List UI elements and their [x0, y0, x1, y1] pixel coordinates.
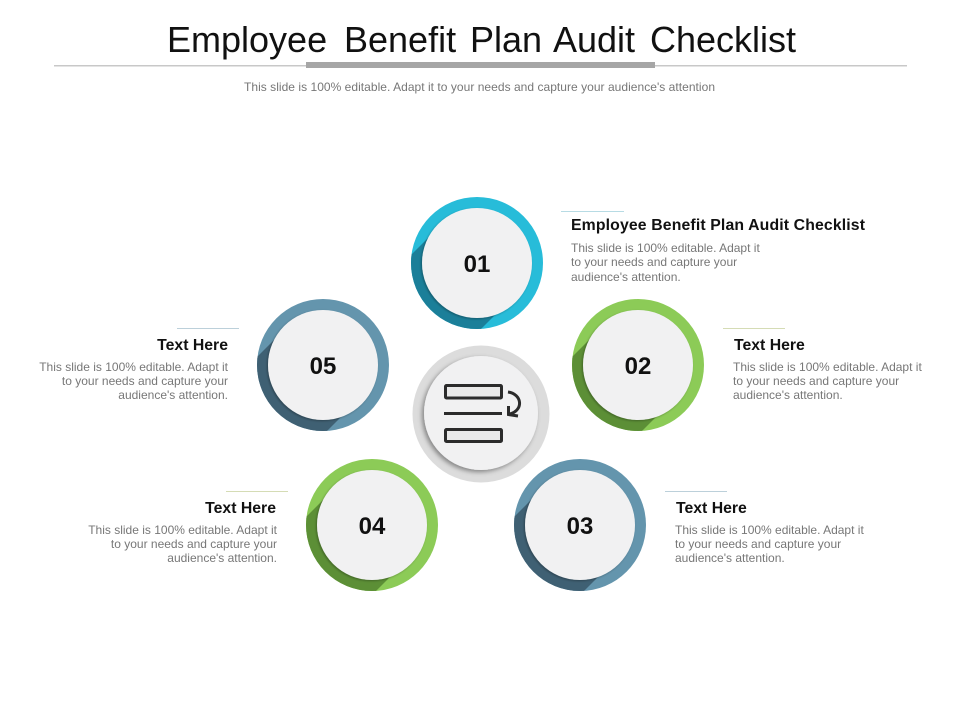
step 02 circle: [572, 299, 704, 431]
step 02 circle: 02: [625, 353, 651, 380]
text block 01: to your needs and capture your: [571, 255, 737, 269]
step 04 circle: [306, 459, 438, 591]
step 05 circle: 05: [310, 353, 336, 380]
text block 04: This slide is 100% editable. Adapt it: [88, 523, 278, 537]
title: Plan: [470, 19, 542, 60]
step 04 circle: 04: [359, 513, 386, 540]
text block 05: [39, 328, 239, 402]
text block 05: Text Here: [157, 337, 228, 354]
text block 03: audience's attention.: [675, 551, 785, 565]
title: Employee: [167, 19, 327, 60]
step 05 circle: [257, 299, 389, 431]
text block 03: This slide is 100% editable. Adapt it: [675, 523, 864, 537]
text block 02: audience's attention.: [733, 388, 843, 402]
text block 02: Text Here: [734, 337, 805, 354]
text block 03: [665, 491, 864, 565]
text block 01: [561, 211, 866, 284]
text block 01: Employee Benefit Plan Audit Checklist: [571, 217, 866, 234]
step 01 circle: [411, 197, 543, 329]
text block 04: [88, 491, 288, 565]
text block 02: This slide is 100% editable. Adapt it: [733, 360, 922, 374]
text block 04: Text Here: [205, 500, 276, 517]
text block 04: audience's attention.: [167, 551, 277, 565]
text block 03: Text Here: [676, 500, 747, 517]
text block 01: This slide is 100% editable. Adapt it: [571, 241, 760, 255]
text block 04: to your needs and capture your: [111, 537, 277, 551]
text block 05: to your needs and capture your: [62, 374, 228, 388]
text block 02: to your needs and capture your: [733, 374, 899, 388]
title: Audit: [553, 19, 635, 60]
step 03 circle: 03: [567, 513, 593, 540]
text block 05: This slide is 100% editable. Adapt it: [39, 360, 229, 374]
text block 02: [723, 328, 922, 402]
title: Benefit: [344, 19, 456, 60]
step 03 circle: [514, 459, 646, 591]
step 01 circle: 01: [464, 251, 490, 278]
subtitle: This slide is 100% editable. Adapt it to your needs and capture your audience's attention: [244, 80, 715, 94]
text block 05: audience's attention.: [118, 388, 228, 402]
center hub: [412, 346, 550, 482]
text block 03: to your needs and capture your: [675, 537, 841, 551]
title underline: [54, 62, 907, 68]
title: Checklist: [650, 19, 796, 60]
text block 01: audience's attention.: [571, 270, 681, 284]
icon: checklist with arrow: [444, 386, 520, 442]
